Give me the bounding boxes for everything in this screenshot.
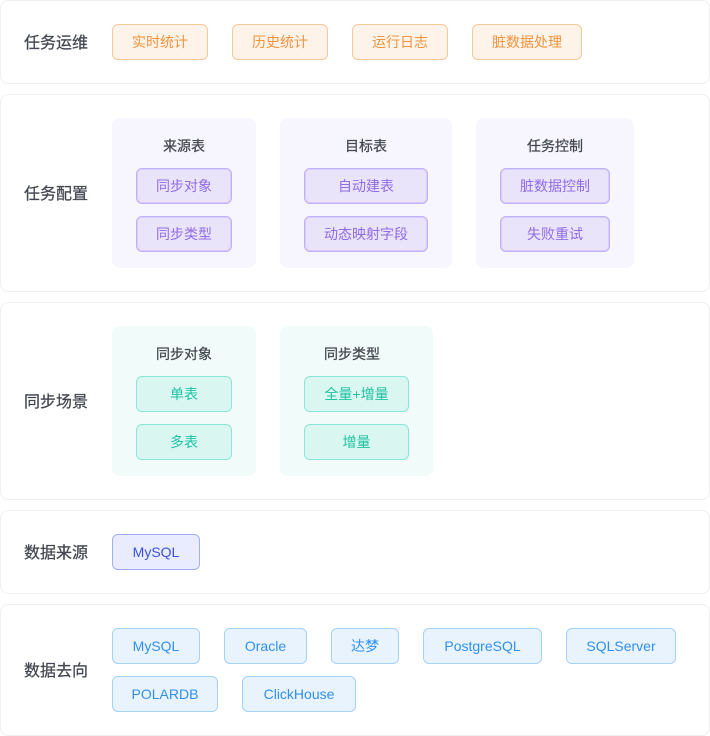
chip: incremental: 增量 — [342, 434, 370, 450]
chip: failure retry: 失败重试 — [527, 226, 583, 242]
group heading: sync type: 同步类型 — [324, 346, 380, 362]
panel: task operations — [0, 0, 710, 84]
chip: sync object: 同步对象 — [156, 178, 212, 194]
group: sync object — [112, 326, 256, 476]
chip: history stats — [232, 24, 328, 60]
group heading: task control: 任务控制 — [527, 138, 583, 154]
chip: history stats: 历史统计 — [252, 34, 308, 50]
panel: task configuration — [0, 94, 710, 292]
chip: realtime stats: 实时统计 — [132, 34, 188, 50]
chip: sync type: 同步类型 — [156, 226, 212, 242]
chip: ClickHouse: ClickHouse — [264, 686, 334, 702]
chip: Oracle: Oracle — [245, 638, 286, 654]
chip: full plus incremental — [304, 376, 409, 412]
chip: SQLServer: SQLServer — [586, 638, 656, 654]
heading: task operations: 任务运维 — [24, 35, 88, 52]
panel: sync scenarios — [0, 302, 710, 500]
chip: MySQL source: MySQL — [133, 544, 179, 560]
chip: sync type — [136, 216, 232, 252]
chip: POLARDB — [112, 676, 218, 712]
group heading: sync object: 同步对象 — [156, 346, 212, 362]
chip: ClickHouse — [242, 676, 356, 712]
group: task control — [476, 118, 634, 268]
chip: dirty data control — [500, 168, 610, 204]
group heading: target table: 目标表 — [345, 138, 387, 154]
heading: task configuration: 任务配置 — [24, 186, 88, 203]
chip: dirty data handling: 脏数据处理 — [492, 34, 562, 50]
group heading: source table: 来源表 — [163, 138, 205, 154]
panel: data source — [0, 510, 710, 594]
chip: auto create table — [304, 168, 428, 204]
chip: dynamic field mapping — [304, 216, 428, 252]
chip: single table — [136, 376, 232, 412]
chip: Dameng: 达梦 — [351, 638, 379, 654]
heading: data source: 数据来源 — [24, 545, 88, 562]
heading: sync scenarios: 同步场景 — [24, 394, 88, 411]
chip: dynamic field mapping: 动态映射字段 — [324, 226, 408, 242]
chip: run logs — [352, 24, 448, 60]
chip: incremental — [304, 424, 409, 460]
chip: PostgreSQL: PostgreSQL — [444, 638, 521, 654]
chip: MySQL: MySQL — [133, 638, 179, 654]
chip: SQLServer — [566, 628, 676, 664]
chip: multiple tables — [136, 424, 232, 460]
chip: single table: 单表 — [170, 386, 198, 402]
chip: MySQL — [112, 628, 200, 664]
chip: run logs: 运行日志 — [372, 34, 428, 50]
chip: MySQL source — [112, 534, 200, 570]
chip: Oracle — [224, 628, 307, 664]
chip: dirty data control: 脏数据控制 — [520, 178, 590, 194]
chip: dirty data handling — [472, 24, 582, 60]
chip: full plus incremental: 全量+增量 — [324, 386, 389, 402]
chip: auto create table: 自动建表 — [338, 178, 394, 194]
panel: data destination — [0, 604, 710, 736]
group: target table — [280, 118, 452, 268]
chip: multiple tables: 多表 — [170, 434, 198, 450]
chip: POLARDB: POLARDB — [132, 686, 198, 702]
chip: failure retry — [500, 216, 610, 252]
group: source table — [112, 118, 256, 268]
chip: sync object — [136, 168, 232, 204]
chip: realtime stats — [112, 24, 208, 60]
heading: data destination: 数据去向 — [24, 663, 88, 680]
chip: PostgreSQL — [423, 628, 542, 664]
chip: Dameng — [331, 628, 399, 664]
group: sync type — [280, 326, 433, 476]
